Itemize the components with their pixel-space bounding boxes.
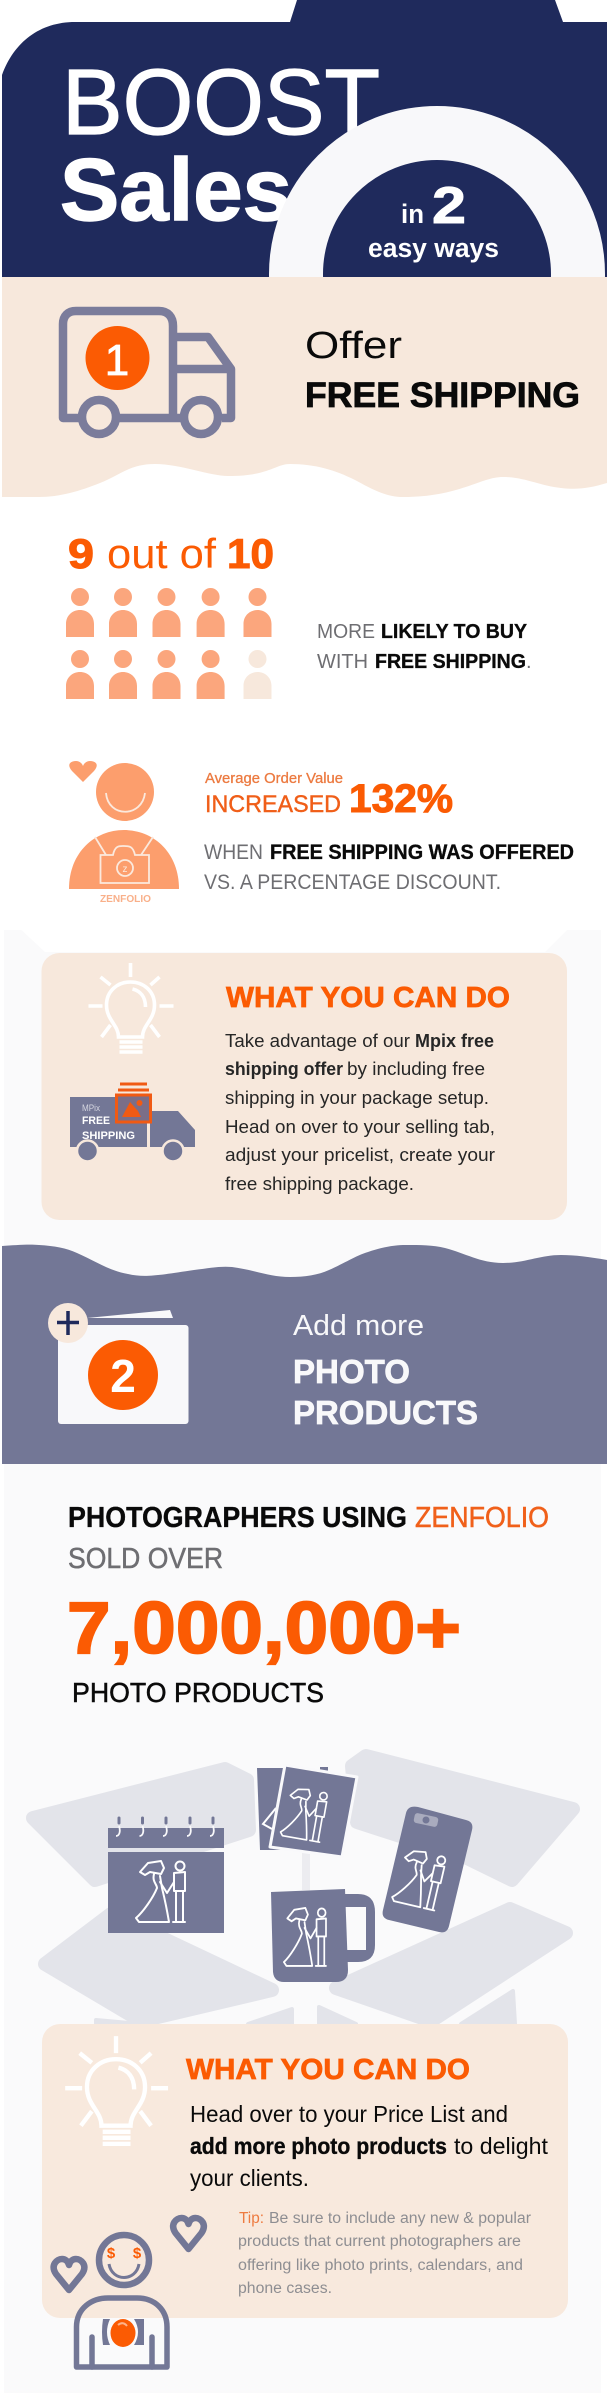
body text: your clients. <box>190 2165 309 2191</box>
heading: photo products <box>293 1353 478 1431</box>
text: photo products: PHOTO PRODUCTS <box>72 1677 324 1708</box>
icon: truck with number 1 <box>63 311 231 434</box>
icon: Mpix free shipping truck <box>70 1084 195 1162</box>
icon: happy customer with camera: z <box>122 864 128 875</box>
stat: 9 out of 10: 9 <box>68 530 94 577</box>
tip text: products that current photographers are <box>238 2233 521 2250</box>
icon: truck with number 1: 1 <box>105 336 129 385</box>
body text: shipping in your package setup. <box>225 1087 489 1108</box>
panel: offer free shipping <box>2 277 607 497</box>
title: BOOST: BOOST <box>62 50 380 154</box>
body text: Mpix free <box>415 1030 494 1051</box>
text: when free shipping was offered <box>204 841 574 894</box>
text: more likely to buy: FREE SHIPPING <box>375 651 526 673</box>
tip text: Tip: <box>239 2210 264 2227</box>
stat: 9 out of 10 <box>68 530 274 577</box>
body text <box>190 2101 549 2191</box>
stat: average order value increased 132%: INCREASED <box>205 791 341 818</box>
panel: what you can do (shipping) <box>42 953 567 1220</box>
text: photographers using zenfolio: ZENFOLIO <box>415 1502 549 1534</box>
stat: 9 out of 10: 10 <box>227 530 274 577</box>
page background <box>4 930 601 2393</box>
tip text: Be sure to include any new & popular <box>269 2210 531 2227</box>
body text: adjust your pricelist, create your <box>225 1144 495 1165</box>
subtitle: in 2 easy ways: 2 <box>432 177 466 235</box>
heading: add more: Add more <box>293 1310 424 1342</box>
label: ZENFOLIO: ZENFOLIO <box>100 894 151 905</box>
stat: 7,000,000+: 7,000,000+ <box>67 1588 461 1669</box>
tip text: offering like photo prints, calendars, and <box>238 2257 523 2274</box>
text: when free shipping was offered: VS. A PERCENTAGE DISCOUNT. <box>204 871 501 894</box>
subtitle: in 2 easy ways: in <box>401 199 424 229</box>
subtitle: in 2 easy ways: easy ways <box>368 235 499 263</box>
text: more likely to buy <box>317 621 532 673</box>
panel: what you can do (products) <box>42 2024 568 2318</box>
icon: happy customer with camera <box>69 761 179 905</box>
body text: by including free <box>347 1058 485 1079</box>
product: calendar <box>108 1818 224 1933</box>
tip text <box>238 2210 531 2297</box>
body text: add more photo products <box>190 2133 447 2159</box>
body text: free shipping package. <box>225 1173 414 1194</box>
heading: photo products: PHOTO <box>293 1353 410 1390</box>
white top area with cut corners <box>0 500 607 952</box>
icon: photo book with plus and number 2: 2 <box>110 1350 136 1402</box>
body text: Head on over to your selling tab, <box>225 1116 495 1137</box>
icon: happy photographer with hearts <box>54 2218 204 2367</box>
text: photographers using zenfolio <box>68 1502 549 1575</box>
product: mug <box>271 1889 375 1982</box>
title: Sales: Sales <box>60 140 292 239</box>
tip text: phone cases. <box>238 2280 332 2297</box>
illustration: open box with photo products <box>33 1756 573 2026</box>
icon: photo book with plus and number 2 <box>48 1303 188 1424</box>
text: photographers using zenfolio: PHOTOGRAPHERS USING <box>68 1502 407 1534</box>
header: camera shape <box>2 0 607 277</box>
product: photo prints <box>257 1765 357 1857</box>
stat: average order value increased 132%: 132% <box>349 777 453 821</box>
icon: Mpix free shipping truck: FREE <box>82 1115 110 1127</box>
heading: what you can do: WHAT YOU CAN DO <box>226 982 510 1014</box>
text: more likely to buy: WITH <box>317 651 368 673</box>
text: more likely to buy: LIKELY TO BUY <box>381 621 528 643</box>
icon: Mpix free shipping truck: MPix <box>82 1103 100 1113</box>
heading: FREE SHIPPING: FREE SHIPPING <box>305 376 580 415</box>
body text <box>225 1030 495 1194</box>
panel: add more photo products <box>2 1245 607 1464</box>
stat: 9 out of 10: out of <box>107 530 216 577</box>
subtitle: in 2 easy ways <box>368 177 499 263</box>
text: when free shipping was offered: WHEN <box>204 841 263 864</box>
body text: to delight <box>454 2133 549 2159</box>
body text: shipping offer <box>225 1058 343 1079</box>
icon array: 9 of 10 people <box>66 588 272 699</box>
heading: photo products: PRODUCTS <box>293 1394 478 1431</box>
stat: average order value increased 132%: Average Order Value <box>205 771 343 787</box>
camera lens ring <box>269 106 605 277</box>
body text: Head over to your Price List and <box>190 2101 508 2127</box>
heading: what you can do: WHAT YOU CAN DO <box>186 2054 470 2086</box>
body text: Take advantage of our <box>225 1030 410 1051</box>
icon: light bulb <box>65 2036 168 2144</box>
stat: average order value increased 132% <box>205 771 453 821</box>
icon: happy photographer with hearts: $ <box>107 2245 116 2262</box>
icon: Mpix free shipping truck: SHIPPING <box>82 1130 135 1142</box>
text: photographers using zenfolio: SOLD OVER <box>68 1543 223 1575</box>
heading: Offer: Offer <box>305 325 402 367</box>
icon: light bulb <box>88 963 174 1052</box>
product: phone case <box>383 1807 472 1932</box>
text: more likely to buy: . <box>526 651 532 673</box>
text: when free shipping was offered: FREE SHIPPING WAS OFFERED <box>270 841 574 864</box>
text: more likely to buy: MORE <box>317 621 375 643</box>
icon: happy photographer with hearts: $ <box>133 2245 142 2262</box>
